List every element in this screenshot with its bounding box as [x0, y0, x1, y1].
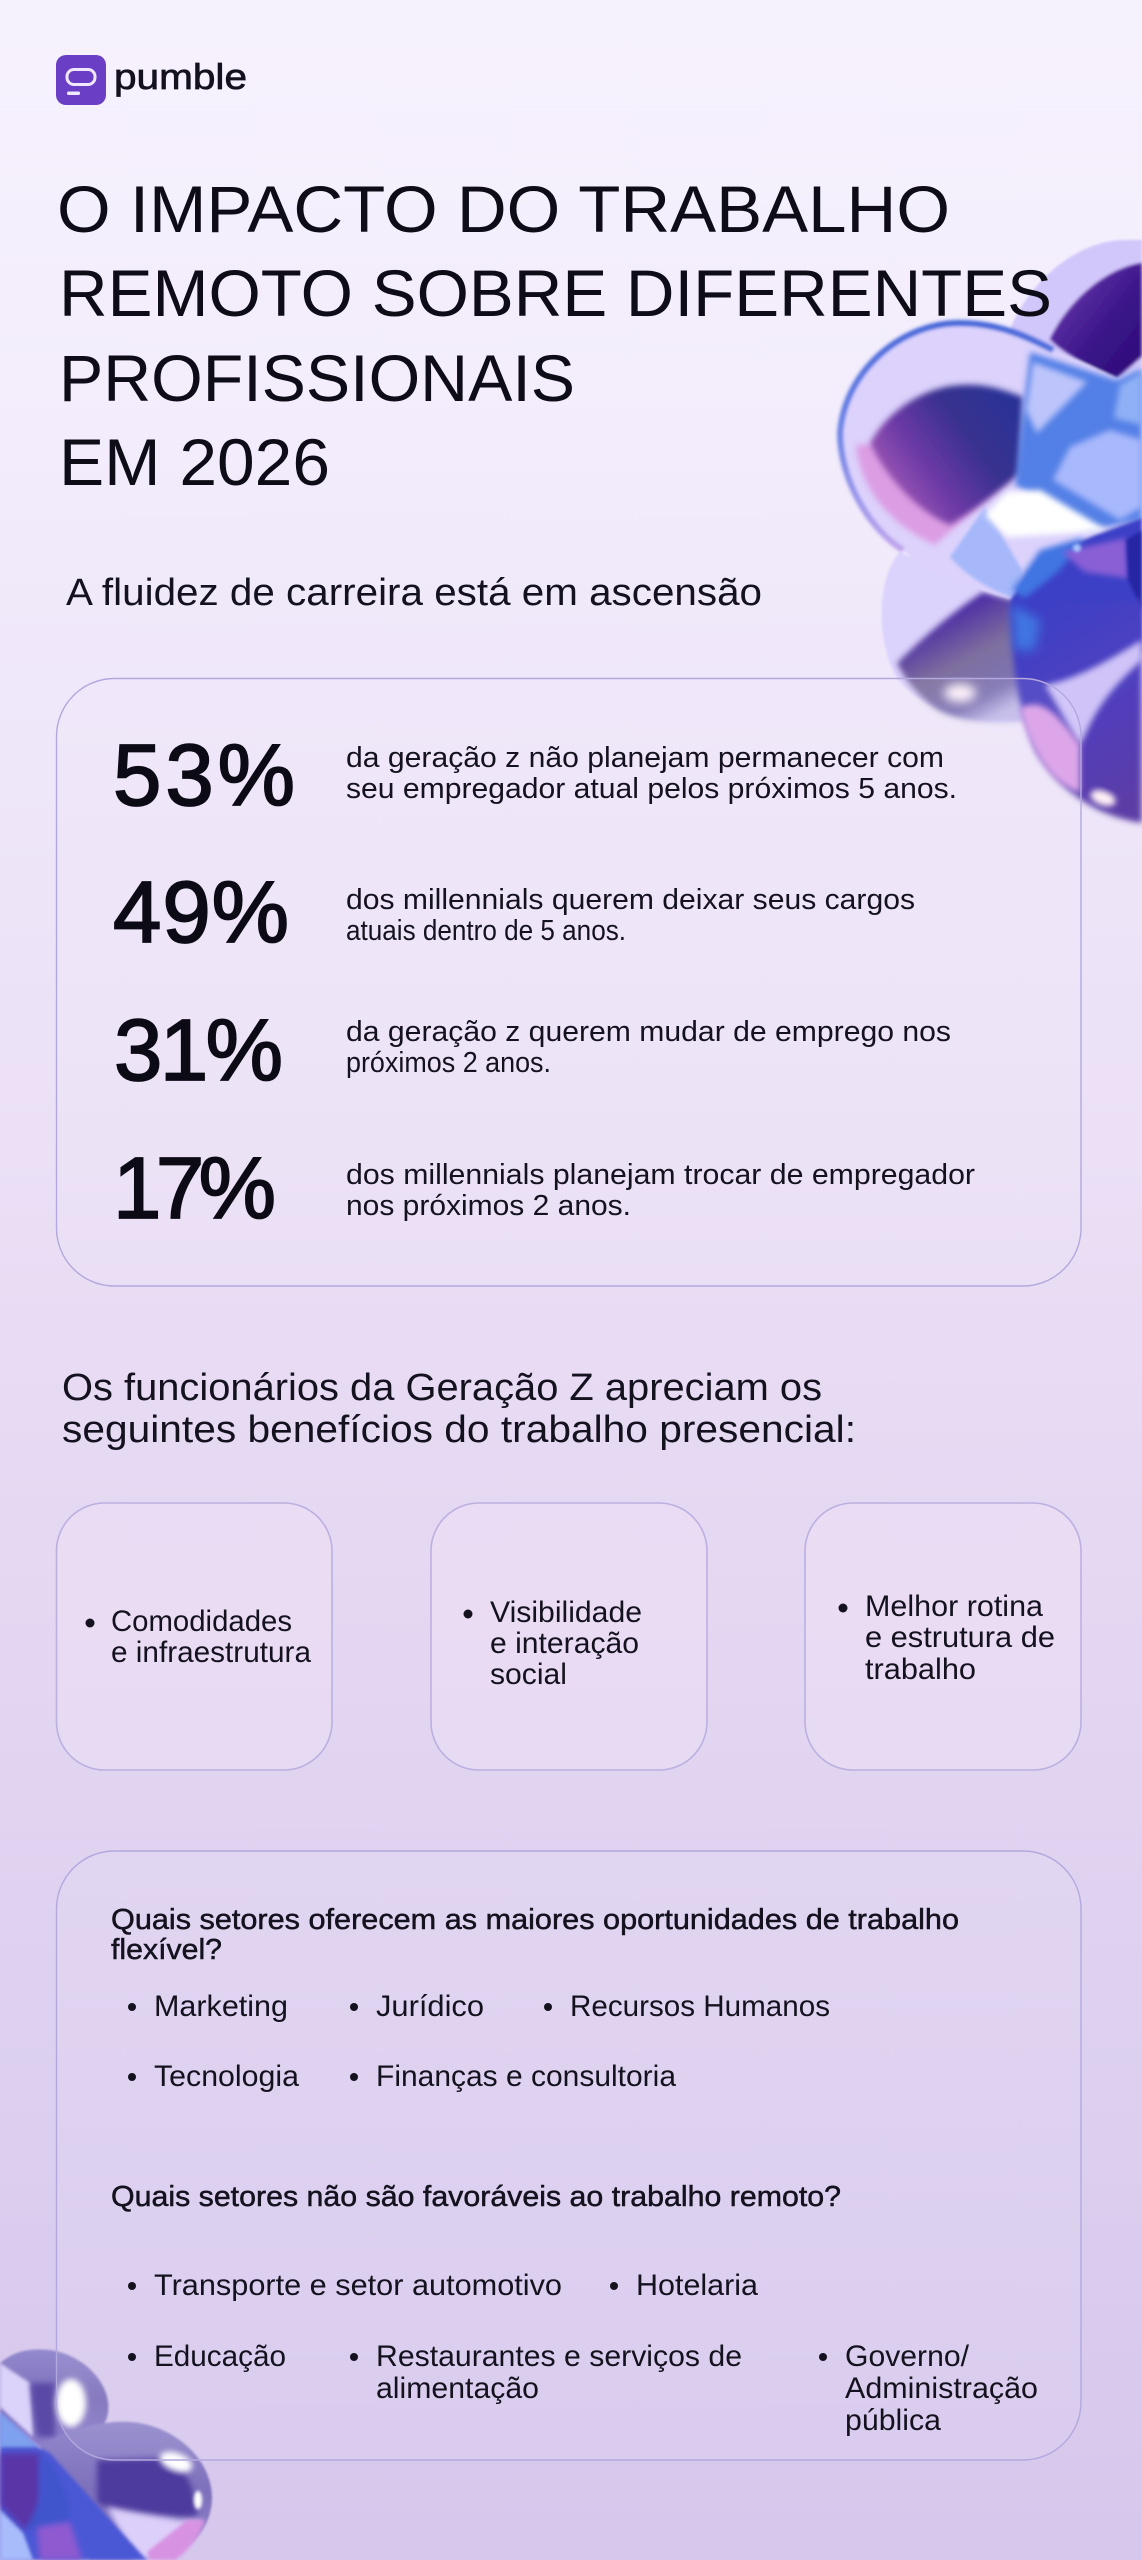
card: amenities [56, 1503, 332, 1770]
question: flexible sectors: flexível? [111, 1934, 222, 1966]
stat 31%: da geração z querem mudar de emprego nos [346, 1016, 951, 1048]
heading: Gen Z benefits: Os funcionários da Geração Z apreciam os [62, 1367, 822, 1409]
heading: Gen Z benefits: seguintes benefícios do trabalho presencial: [62, 1409, 856, 1451]
question: flexible sectors: Quais setores oferecem as maiores oportunidades de trabalho [111, 1904, 959, 1936]
decorative glass blob, bottom left [0, 2350, 212, 2560]
title: PROFISSIONAIS [59, 341, 575, 415]
stat 49%: atuais dentro de 5 anos. [346, 915, 626, 947]
list: unfavourable sectors: Educação [154, 2340, 286, 2373]
subheading: career fluidity: A fluidez de carreira está em ascensão [66, 572, 762, 614]
list: unfavourable sectors: Administração [845, 2372, 1038, 2405]
card: routine [805, 1503, 1081, 1770]
stat 17%: nos próximos 2 anos. [346, 1190, 631, 1222]
stat 17% [113, 1140, 975, 1237]
question: flexible sectors [111, 1904, 959, 1966]
card: routine: trabalho [865, 1653, 976, 1686]
card: routine: e estrutura de [865, 1621, 1055, 1654]
question: unfavourable sectors: Quais setores não são favoráveis ao trabalho remoto? [111, 2181, 841, 2213]
list: unfavourable sectors: Transporte e setor automotivo [154, 2269, 562, 2302]
list: unfavourable sectors: Hotelaria [636, 2269, 758, 2302]
stat 17%: 17% [113, 1140, 276, 1237]
card: visibility: social [490, 1658, 567, 1691]
stat 31% [114, 1002, 951, 1099]
title: REMOTO SOBRE DIFERENTES [59, 256, 1052, 330]
title: O IMPACTO DO TRABALHO [57, 172, 950, 246]
logo: pumble [56, 55, 247, 105]
stat 53% [113, 727, 957, 824]
stat 49% [113, 864, 915, 961]
list: flexible sectors: Marketing [154, 1990, 288, 2023]
stat 17%: dos millennials planejam trocar de empregador [346, 1159, 975, 1191]
card: amenities: e infraestrutura [111, 1636, 311, 1669]
card: visibility [431, 1503, 707, 1770]
list: flexible sectors [128, 1990, 830, 2093]
list: unfavourable sectors: Governo/ [845, 2340, 970, 2373]
heading: Gen Z benefits [62, 1367, 856, 1451]
stat 49%: 49% [113, 864, 289, 961]
list: flexible sectors: Tecnologia [154, 2060, 299, 2093]
panel: career statistics [56, 678, 1081, 1286]
list: flexible sectors: Recursos Humanos [570, 1990, 830, 2023]
card: amenities: Comodidades [111, 1605, 292, 1638]
stat 49%: dos millennials querem deixar seus cargos [346, 884, 915, 916]
list: unfavourable sectors: pública [845, 2404, 941, 2437]
title: EM 2026 [59, 425, 330, 499]
list: unfavourable sectors: Restaurantes e serviços de [376, 2340, 742, 2373]
card: visibility: e interação [490, 1627, 639, 1660]
list: flexible sectors: Jurídico [376, 1990, 484, 2023]
decorative glass blob, top right [840, 240, 1142, 823]
list: unfavourable sectors: alimentação [376, 2372, 539, 2405]
list: flexible sectors: Finanças e consultoria [376, 2060, 676, 2093]
stat 53%: seu empregador atual pelos próximos 5 anos. [346, 773, 957, 805]
stat 31%: 31% [114, 1002, 283, 1099]
wordmark: pumble [114, 56, 247, 97]
list: unfavourable sectors [128, 2269, 1038, 2437]
title [57, 172, 1052, 499]
card: routine: Melhor rotina [865, 1590, 1043, 1623]
icon: pumble mark [56, 55, 106, 105]
panel: sectors [56, 1851, 1081, 2460]
stat 31%: próximos 2 anos. [346, 1047, 551, 1079]
stat 53%: 53% [113, 727, 295, 824]
stat 53%: da geração z não planejam permanecer com [346, 742, 944, 774]
card: visibility: Visibilidade [490, 1596, 642, 1629]
